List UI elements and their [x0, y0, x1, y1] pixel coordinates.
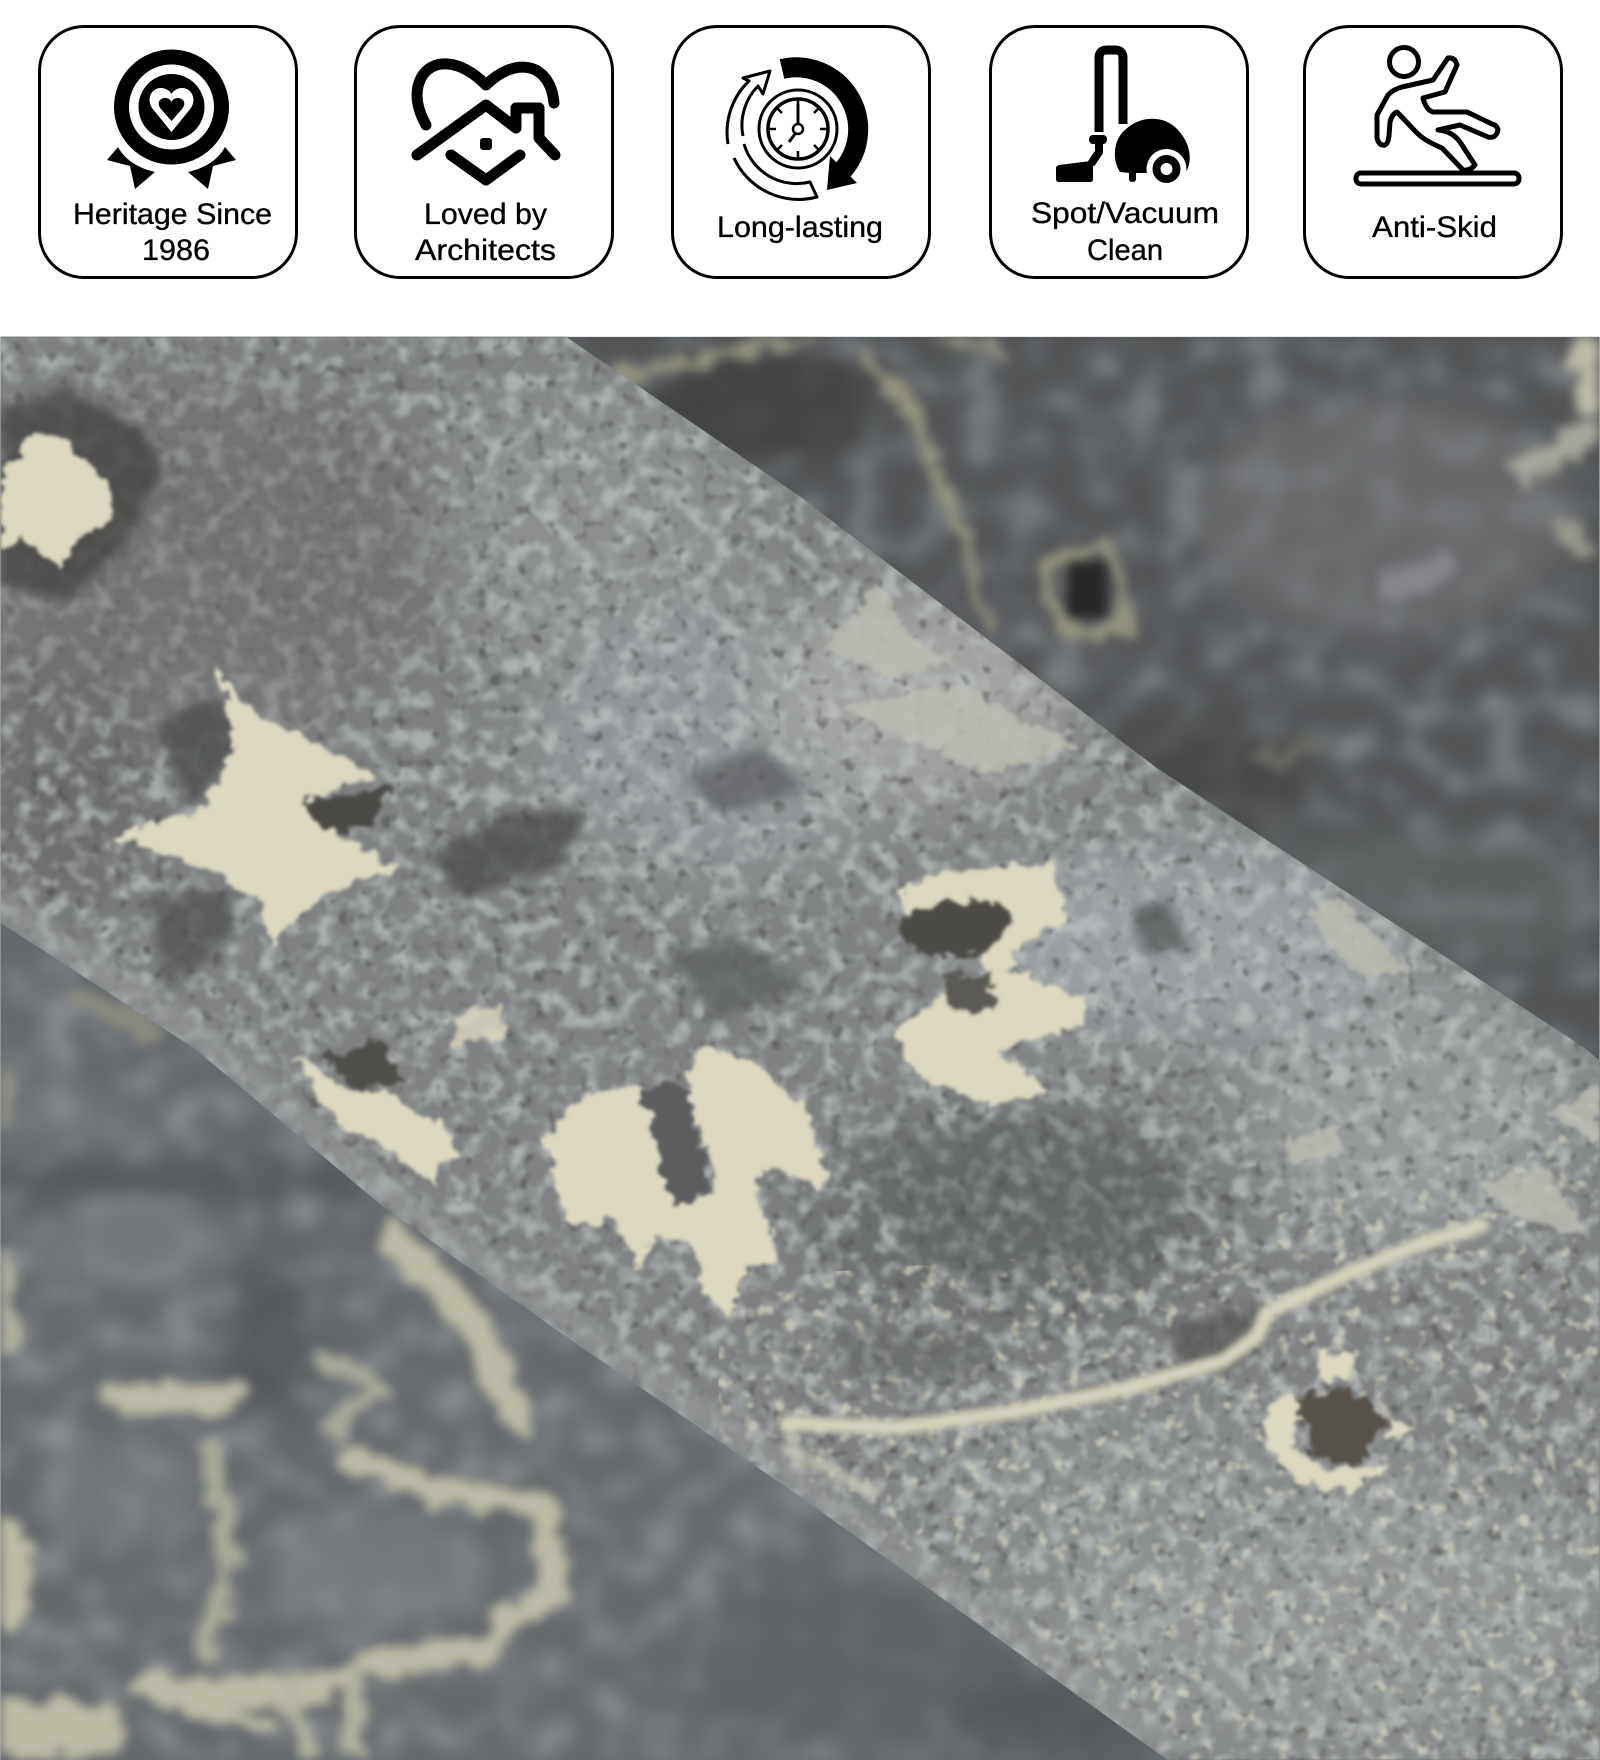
card: Long-lasting — [671, 25, 931, 279]
blurred cream pattern, lower left — [0, 993, 556, 1760]
card: Heritage Since 1986 — [38, 25, 298, 279]
icon: clock with circular arrows — [727, 67, 858, 199]
cream motifs — [0, 429, 1417, 1493]
motif: E-shaped figure — [893, 864, 1089, 1106]
label: Long-lasting: Long-lasting — [717, 211, 883, 244]
icon: vacuum cleaner — [1056, 50, 1190, 189]
motif: ring — [1263, 1392, 1386, 1493]
card: Spot/Vacuum Clean — [989, 25, 1249, 279]
label: Spot/Vacuum Clean: Clean — [1087, 234, 1163, 267]
label: Spot/Vacuum Clean — [1031, 197, 1219, 267]
broad light and dark tonal areas — [0, 393, 1600, 1751]
label: Anti-Skid: Anti-Skid — [1372, 211, 1497, 244]
blurred cream pattern, upper right — [612, 337, 1589, 758]
card: Loved by Architects — [354, 25, 614, 279]
faded light motifs on the upper edge — [825, 578, 1600, 1235]
motif: small flower — [294, 1055, 460, 1184]
motif: camel — [545, 1044, 831, 1319]
label: Heritage Since 1986 — [73, 198, 272, 267]
icon: medal with heart — [107, 57, 236, 189]
dark pile patches — [0, 387, 1269, 1381]
window shape, dark center — [1067, 561, 1107, 617]
dark interiors of cream motifs — [303, 786, 1386, 1470]
lighter rolled lower edge — [0, 887, 1168, 1760]
motif: top-left blossom — [0, 429, 112, 567]
label: Loved by Architects: Loved by — [424, 198, 547, 231]
motif: star — [112, 662, 404, 943]
label: Heritage Since 1986: Heritage Since — [73, 198, 272, 231]
label: Loved by Architects: Architects — [415, 234, 556, 267]
icon: heart and house — [417, 64, 555, 180]
label: Loved by Architects — [415, 198, 556, 267]
smoother, darker pile in the upper-left corner — [0, 370, 449, 752]
cream border line on the roll — [786, 1226, 1482, 1493]
creamy knots on the lower roll — [718, 1103, 1600, 1760]
icon: person slipping on floor — [1356, 48, 1519, 184]
label: Heritage Since 1986: 1986 — [142, 234, 210, 267]
label: Spot/Vacuum Clean: Spot/Vacuum — [1031, 197, 1219, 230]
card: Anti-Skid — [1303, 25, 1563, 279]
